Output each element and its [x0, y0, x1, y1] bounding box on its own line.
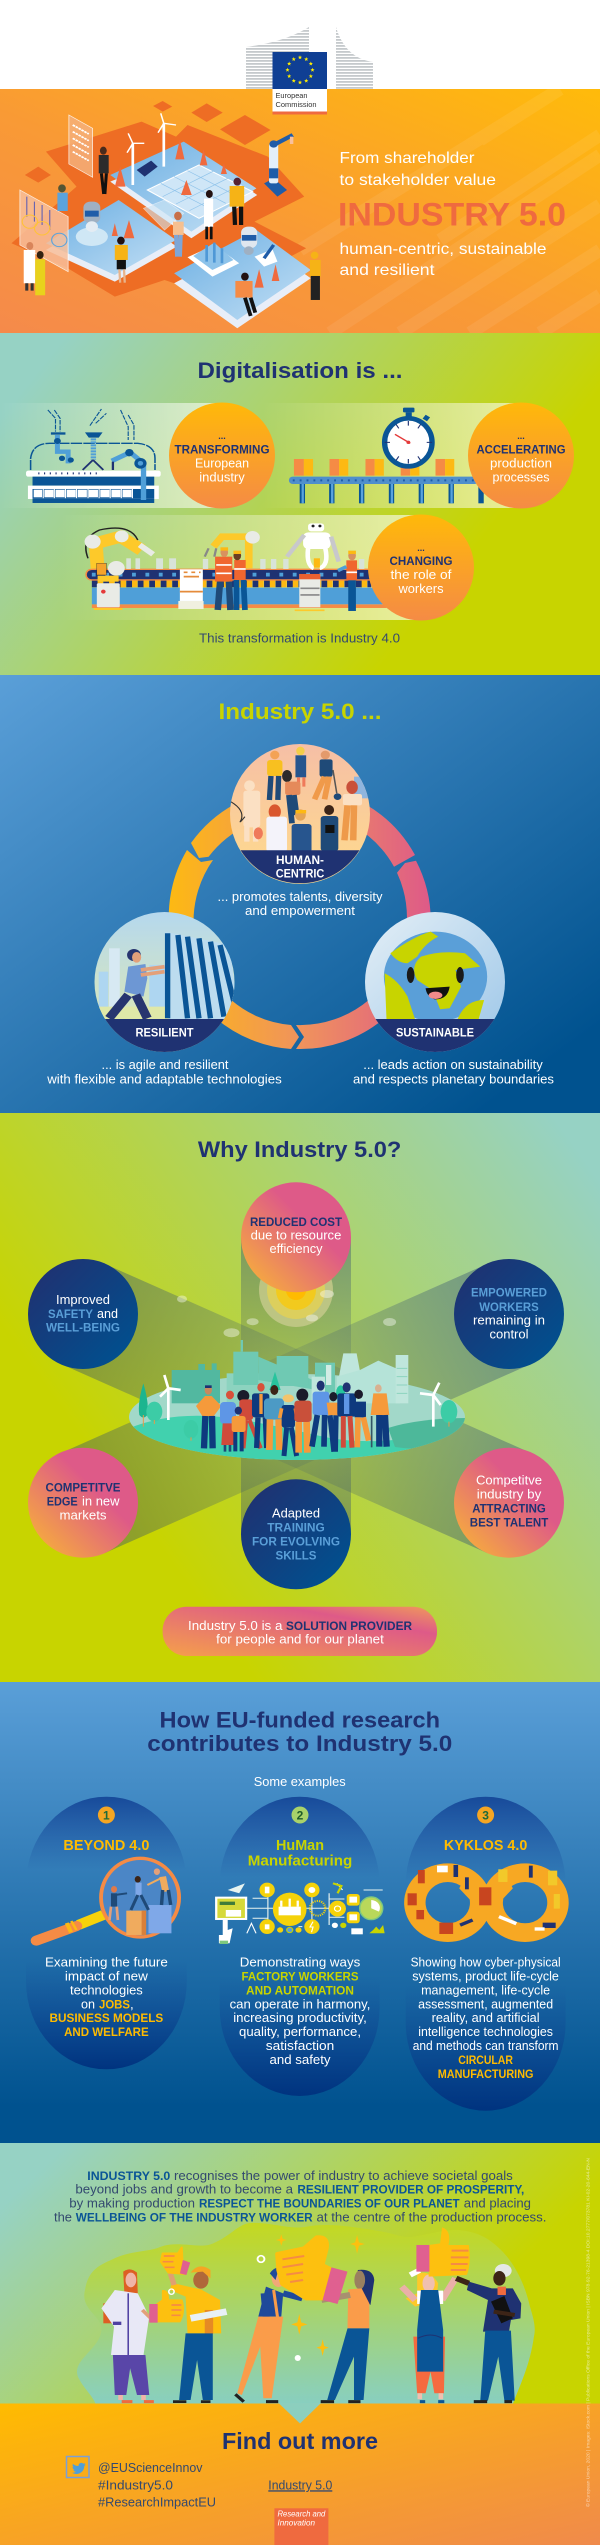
- statement text: at the centre of the production process.: [316, 2209, 546, 2224]
- text: resilient: ... is agile and resilient: [102, 1057, 229, 1072]
- circle: attracting talent: industry by: [477, 1487, 542, 1502]
- circle: reduced cost: efficiency: [270, 1241, 323, 1256]
- panel: closing statement: [0, 2143, 600, 2404]
- card: Beyond 4.0: Examining the future: [45, 1955, 168, 1970]
- hero tagline: [340, 241, 547, 279]
- thumb: apron woman: [416, 2227, 470, 2277]
- card: Beyond 4.0: BEYOND 4.0: [63, 1838, 149, 1854]
- circle: attracting talent: [454, 1448, 564, 1558]
- circle: competitive edge: [28, 1448, 138, 1558]
- logo: European Commission: Commission: [276, 102, 317, 109]
- pointer triangle: [278, 2403, 321, 2424]
- badge: Research and Innovation: Research and: [278, 2509, 326, 2519]
- circle: competitive edge: COMPETITVE: [46, 1481, 120, 1495]
- heading: research: How EU-funded research: [160, 1707, 440, 1732]
- circle: human-centric: [230, 744, 371, 884]
- panel: EU-funded research: [0, 1682, 600, 2143]
- circle: empowered workers: WORKERS: [479, 1300, 539, 1314]
- circle: attracting talent: Competitve: [476, 1473, 542, 1488]
- legal line: © European Union, 2020 | Images: iStock.com | Publications Office of the European Union | ISBN 978-92-76-21398-4 DOI:10.2777/073781 KI-02-20-644-EN-N: [586, 2158, 590, 2507]
- circle: resilient: [92, 912, 241, 1057]
- text: human-centric: and empowerment: [245, 903, 355, 918]
- circle: adapted training: SKILLS: [276, 1548, 316, 1562]
- card: KYKLOS 4.0: reality, and artificial: [432, 2010, 540, 2025]
- big thumb: [277, 2237, 347, 2304]
- heading: Industry 5.0: Industry 5.0 ...: [218, 699, 382, 724]
- card: KYKLOS 4.0: assessment, augmented: [418, 1996, 553, 2011]
- statement text: WELLBEING OF THE INDUSTRY WORKER: [76, 2210, 313, 2224]
- icon: magnifying glass with climbing people: [36, 1858, 179, 1941]
- card: KYKLOS 4.0: 3: [482, 1808, 489, 1822]
- circle: accelerating: ...: [517, 431, 525, 441]
- card: KYKLOS 4.0: systems, product life-cycle: [412, 1969, 559, 1984]
- hero title: INDUSTRY 5.0: [338, 196, 566, 232]
- panel: digitalisation: [0, 333, 600, 675]
- hero subtitle: to stakeholder value: [340, 172, 496, 189]
- circle: safety and well-being: [28, 1259, 138, 1369]
- card: HuMan Manufacturing: can operate in harmony,: [230, 1996, 370, 2011]
- text: sustainable: ... leads action on sustainability: [363, 1057, 543, 1072]
- card: HuMan Manufacturing: quality, performance,: [239, 2024, 361, 2039]
- card: Beyond 4.0: 1: [103, 1808, 110, 1822]
- circle: attracting talent: BEST TALENT: [470, 1516, 549, 1530]
- card: KYKLOS 4.0: CIRCULAR: [458, 2053, 513, 2067]
- card: KYKLOS 4.0: Showing how cyber-physical: [411, 1955, 561, 1970]
- statement text: RESPECT THE BOUNDARIES OF OUR PLANET: [199, 2197, 460, 2211]
- circle: safety and well-being: Improved: [56, 1292, 110, 1307]
- circle: empowered workers: EMPOWERED: [471, 1286, 547, 1300]
- card: HuMan Manufacturing: and safety: [270, 2052, 331, 2067]
- card: Beyond 4.0: ,: [130, 1996, 134, 2011]
- text: resilient: [46, 1057, 282, 1086]
- circle: empowered workers: control: [490, 1327, 529, 1342]
- hero people: [24, 147, 321, 316]
- hero tagline: human-centric, sustainable: [340, 241, 547, 258]
- person: doctor: [101, 2269, 154, 2402]
- logo: European Commission: [246, 27, 373, 114]
- circle: changing: CHANGING: [390, 554, 452, 568]
- circle: changing: [368, 514, 474, 620]
- panel: hero: [0, 89, 600, 333]
- circle: transforming: industry: [199, 470, 245, 485]
- circle: transforming: [169, 402, 275, 508]
- text: sustainable: [353, 1057, 554, 1086]
- card: HuMan Manufacturing: Manufacturing: [248, 1854, 352, 1870]
- sparkles: [169, 2234, 365, 2361]
- person pushing solar panels: [92, 932, 241, 1020]
- statement text: RESILIENT PROVIDER OF PROSPERITY,: [297, 2183, 524, 2197]
- circle: adapted training: TRAINING: [267, 1521, 325, 1535]
- statement text: and placing: [464, 2196, 531, 2211]
- child: [232, 1407, 246, 1451]
- person: woman with apron: [402, 2268, 455, 2402]
- card: HuMan Manufacturing: Demonstrating ways: [240, 1955, 361, 1970]
- circle: accelerating: ACCELERATING: [476, 443, 566, 457]
- thumb: worker: [161, 2247, 190, 2275]
- card: KYKLOS 4.0: and methods can transform: [413, 2038, 558, 2053]
- statement text: beyond jobs and growth to become a: [75, 2182, 294, 2197]
- card: HuMan Manufacturing: 2: [297, 1808, 304, 1822]
- heading: digitalisation: Digitalisation is ...: [198, 358, 402, 383]
- text: human-centric: [218, 889, 383, 918]
- circle: reduced cost: [241, 1182, 351, 1292]
- callout: solution provider: [163, 1607, 437, 1656]
- card: Beyond 4.0: on: [81, 1996, 95, 2011]
- callout: solution provider: for people and for our planet: [216, 1632, 384, 1647]
- social handles: #Industry5.0: [98, 2477, 173, 2492]
- circle: human-centric: HUMAN-: [276, 853, 324, 867]
- person: man with tablet: [456, 2264, 521, 2402]
- card: Beyond 4.0: technologies: [70, 1982, 143, 1997]
- card: HuMan Manufacturing: AND AUTOMATION: [246, 1983, 354, 1997]
- link: Industry 5.0: Industry 5.0: [268, 2477, 332, 2492]
- card: Beyond 4.0: impact of new: [65, 1969, 148, 1984]
- circle: sustainable: [365, 912, 505, 1057]
- circle: safety and well-being: SAFETY: [48, 1307, 93, 1321]
- badge: Research and Innovation: Innovation: [278, 2518, 315, 2528]
- background blob: [77, 2223, 535, 2404]
- hero subtitle: From shareholder: [340, 150, 475, 167]
- crowd of people: [196, 1381, 389, 1456]
- circle: accelerating: [468, 402, 574, 508]
- social handles: @EUScienceInnov: [98, 2460, 203, 2475]
- statement text: recognises the power of industry to achieve societal goals: [174, 2168, 513, 2183]
- icon: circular manufacturing infinity loop: [408, 1865, 560, 1937]
- circle: transforming: ...: [218, 431, 226, 441]
- beams linking the circles: [61, 1237, 531, 1553]
- circle: changing: the role of: [390, 567, 452, 582]
- circle: accelerating: processes: [492, 470, 550, 485]
- illustration: city skyline, ground and crowd: [125, 1340, 472, 1465]
- card: KYKLOS 4.0: MANUFACTURING: [438, 2067, 533, 2081]
- person: man in orange overalls: [235, 2268, 302, 2402]
- panel: find out more: [0, 2403, 600, 2545]
- text: sustainable: and respects planetary boundaries: [353, 1071, 554, 1086]
- circle: safety and well-being: and: [97, 1306, 118, 1321]
- heading: research: [147, 1707, 452, 1756]
- circle: reduced cost: due to resource: [251, 1227, 341, 1242]
- badge: Research and Innovation: [274, 2508, 328, 2545]
- thumb: doctor: [149, 2291, 183, 2323]
- statement text: [54, 2168, 546, 2224]
- heading: research: contributes to Industry 5.0: [147, 1731, 452, 1756]
- caption: Industry 4.0: This transformation is Industry 4.0: [199, 630, 400, 646]
- panel: Industry 5.0 pillars: [0, 675, 600, 1113]
- social handles: #ResearchImpactEU: [98, 2495, 216, 2510]
- circle: reduced cost: REDUCED COST: [250, 1215, 343, 1229]
- illustration: conveyor and stopwatch: [289, 408, 484, 503]
- circle: transforming: TRANSFORMING: [174, 443, 270, 457]
- band 3: [60, 515, 421, 620]
- card: HuMan Manufacturing: FACTORY WORKERS: [242, 1970, 358, 1984]
- card: KYKLOS 4.0: KYKLOS 4.0: [444, 1838, 527, 1854]
- illustration: robot assembly line with workers: [85, 523, 387, 611]
- illustration: factory machine: [26, 409, 161, 503]
- circle: empowered workers: remaining in: [473, 1312, 545, 1327]
- callout: solution provider: Industry 5.0 is a: [188, 1618, 283, 1633]
- circle: human-centric: CENTRIC: [276, 867, 325, 881]
- hero subtitle: [340, 150, 496, 189]
- hero illustration: isometric smart factory: [11, 101, 321, 328]
- circle: competitive edge: markets: [60, 1507, 107, 1522]
- card: HuMan Manufacturing: [215, 1797, 385, 2096]
- circle: competitive edge: in new: [82, 1493, 120, 1508]
- callout: solution provider: SOLUTION PROVIDER: [286, 1619, 412, 1633]
- subheading: some examples: Some examples: [254, 1774, 346, 1789]
- logo: European Commission: European: [276, 93, 308, 100]
- statement text: INDUSTRY 5.0: [87, 2169, 171, 2183]
- person: worker in yellow: [170, 2266, 227, 2402]
- card: HuMan Manufacturing: increasing productivity,: [233, 2010, 367, 2025]
- turbines and trees: [139, 1375, 457, 1441]
- sun: [259, 1253, 333, 1327]
- circle: sustainable: SUSTAINABLE: [396, 1026, 474, 1040]
- circle: competitive edge: EDGE: [47, 1494, 78, 1508]
- circle: empowered workers: [454, 1259, 564, 1369]
- header: white strip: [0, 0, 600, 89]
- circle: attracting talent: ATTRACTING: [472, 1501, 546, 1515]
- hero tagline: and resilient: [340, 262, 435, 279]
- text: human-centric: ... promotes talents, diversity: [218, 889, 383, 904]
- card: HuMan Manufacturing: satisfaction: [266, 2038, 334, 2053]
- circle: accelerating: production: [490, 456, 552, 471]
- card: Beyond 4.0: BUSINESS MODELS: [50, 2011, 163, 2025]
- statement text: the: [54, 2209, 72, 2224]
- card: Beyond 4.0: [26, 1797, 187, 2069]
- diverse workers group: [231, 747, 371, 852]
- circle: adapted training: FOR EVOLVING: [252, 1534, 340, 1548]
- illustration: six workers raising thumbs up: [101, 2227, 521, 2402]
- smiling globe: [384, 932, 487, 1022]
- clouds: [177, 1290, 396, 1337]
- panel: why Industry 5.0: [0, 1113, 600, 1682]
- circle: changing: workers: [398, 581, 444, 596]
- circle: safety and well-being: WELL-BEING: [46, 1321, 120, 1335]
- social handles: [98, 2460, 216, 2510]
- card: KYKLOS 4.0: management, life-cycle: [421, 1982, 550, 1997]
- heading: find out more: Find out more: [222, 2428, 378, 2454]
- circle: adapted training: Adapted: [272, 1505, 320, 1520]
- card: Beyond 4.0: JOBS: [99, 1997, 130, 2011]
- band 1: [0, 403, 222, 508]
- heading: why: Why Industry 5.0?: [198, 1137, 401, 1162]
- icon: twitter: [66, 2456, 89, 2478]
- circle: transforming: European: [195, 456, 249, 471]
- person: woman in orange top: [321, 2270, 374, 2402]
- icon: connected manufacturing network: [215, 1883, 385, 1944]
- circle: changing: ...: [417, 543, 425, 553]
- card: Beyond 4.0: AND WELFARE: [64, 2025, 149, 2039]
- band 2: [262, 403, 522, 508]
- card: HuMan Manufacturing: HuMan: [276, 1838, 324, 1854]
- ring of arrows: [169, 804, 431, 1049]
- card: KYKLOS 4.0: intelligence technologies: [418, 2024, 553, 2039]
- text: resilient: with flexible and adaptable technologies: [46, 1071, 282, 1086]
- card: KYKLOS 4.0: [406, 1797, 566, 2111]
- statement text: by making production: [69, 2196, 195, 2211]
- circle: resilient: RESILIENT: [136, 1026, 194, 1040]
- circle: adapted training: [241, 1479, 351, 1589]
